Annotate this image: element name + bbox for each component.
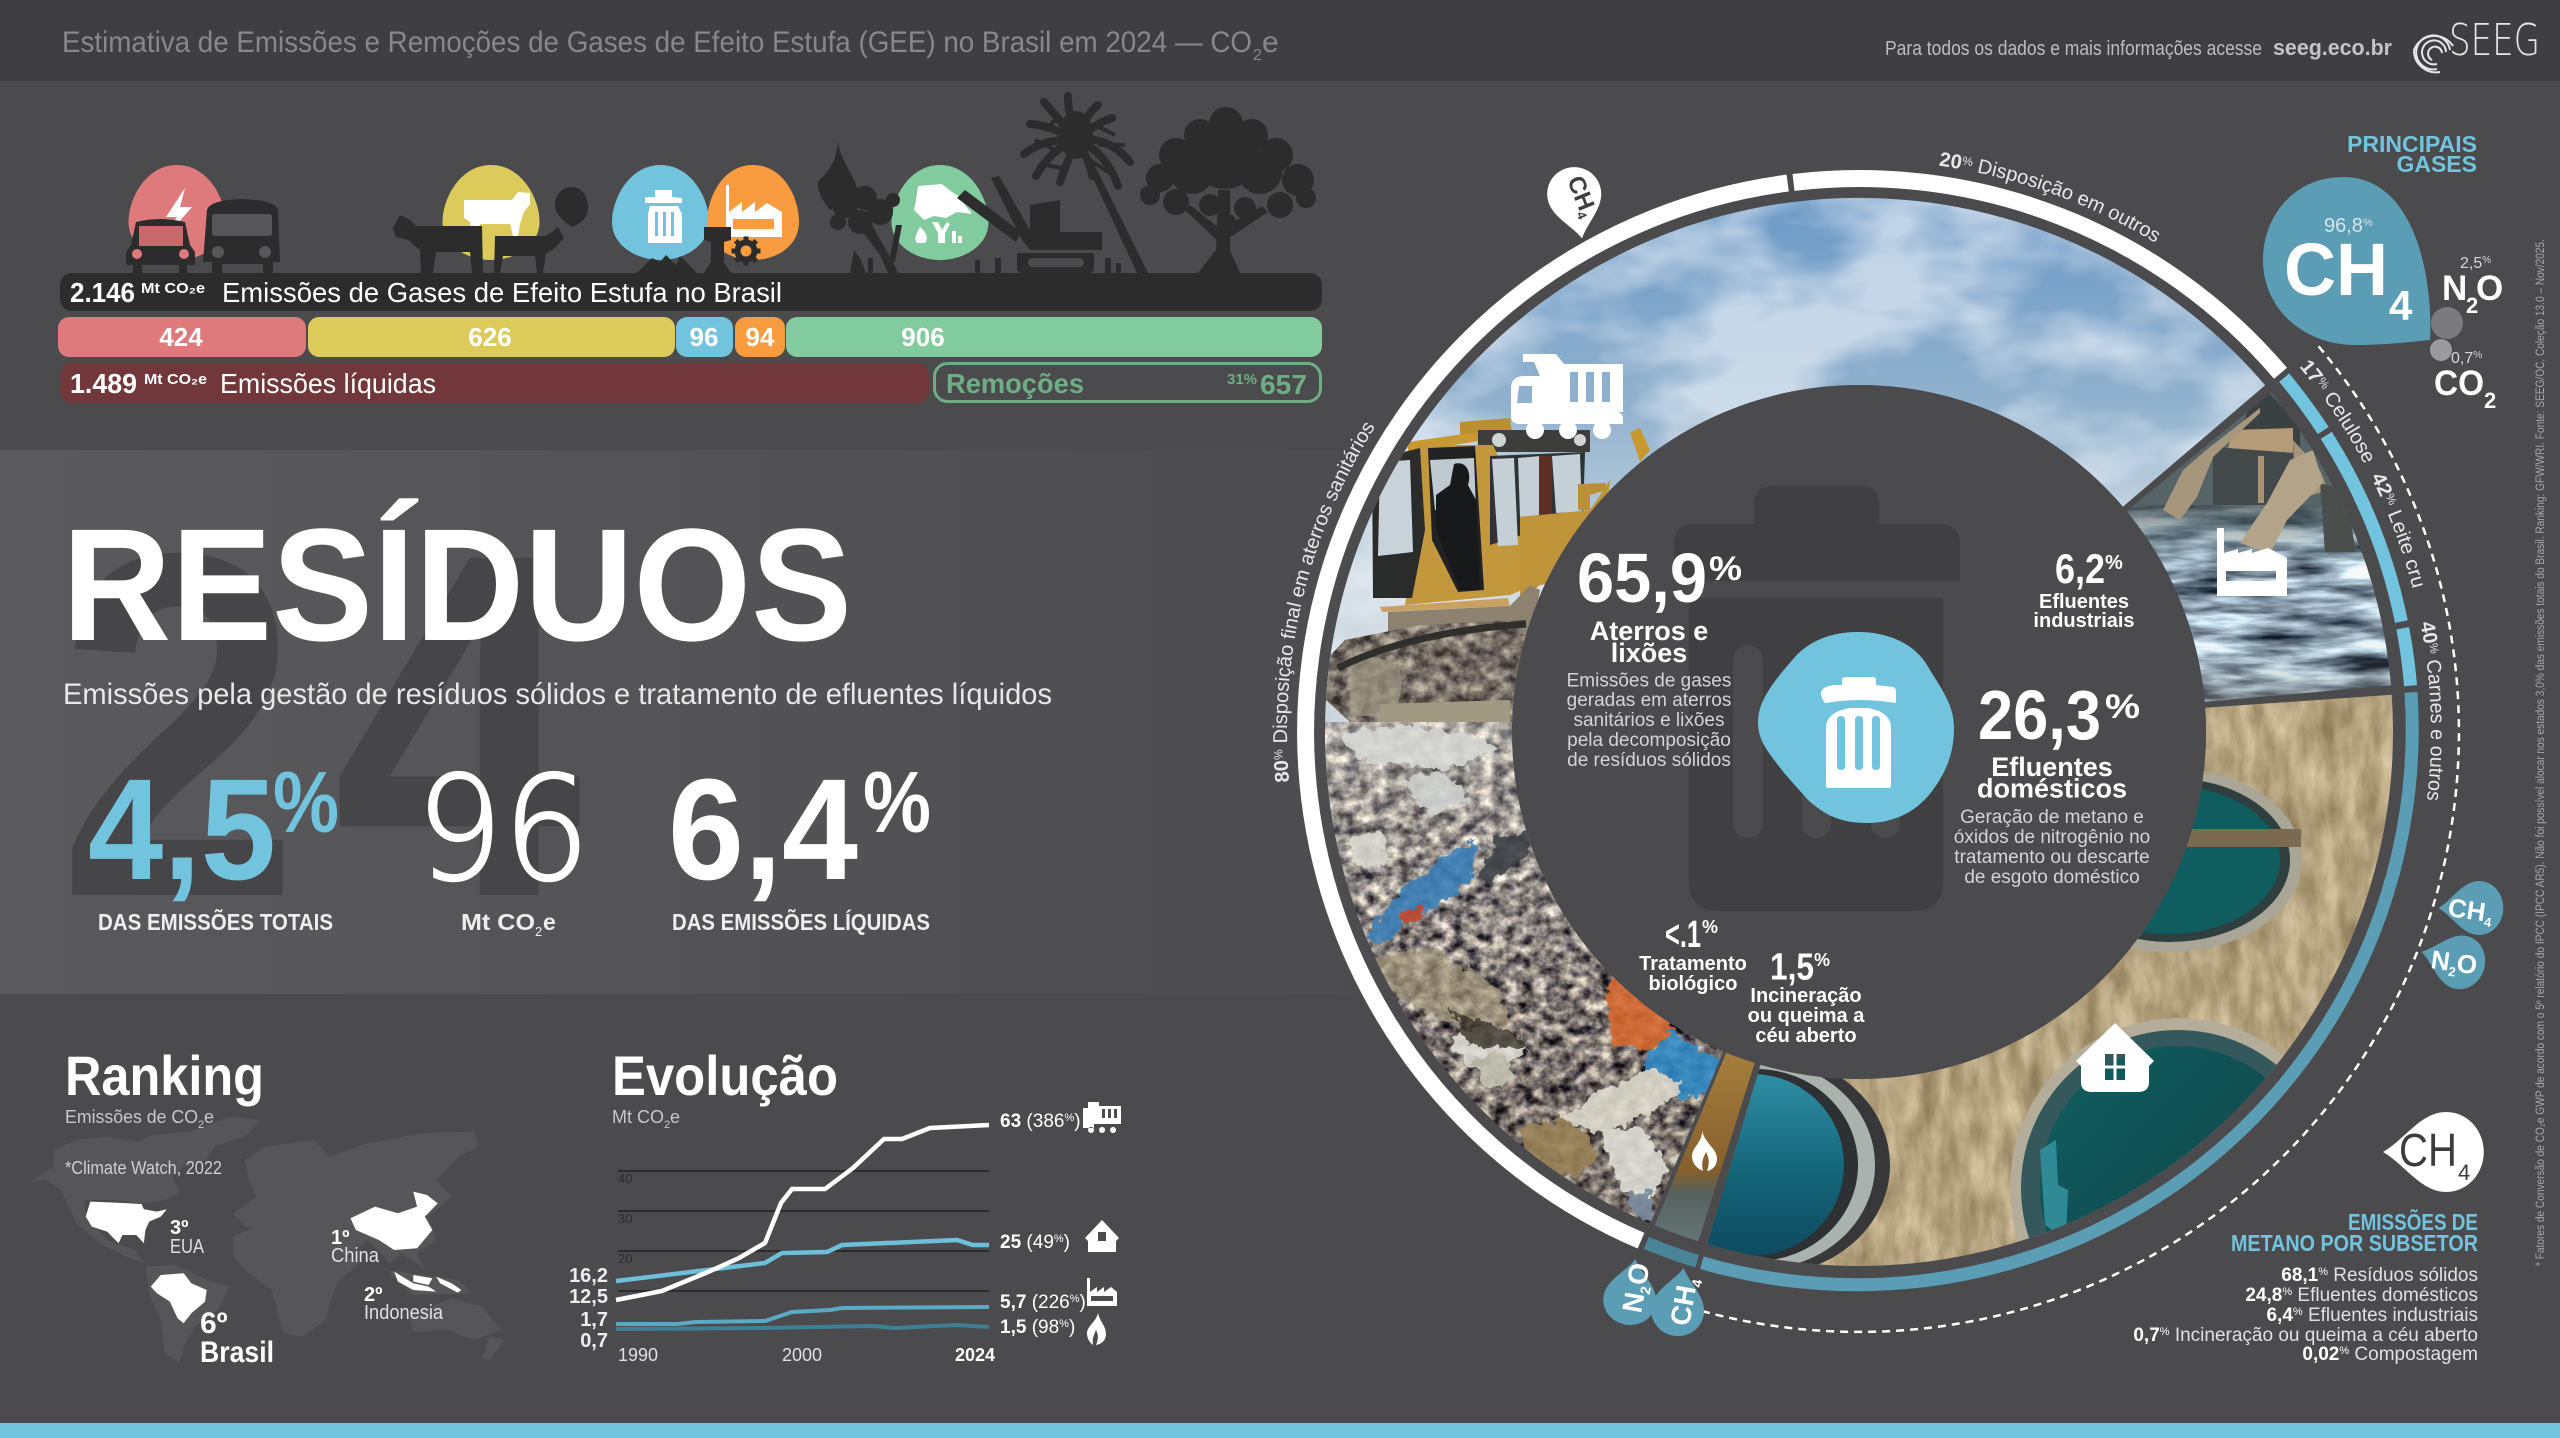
CH4 drop: 4 [2389, 282, 2413, 329]
stat: biological treatment: <.1 [1665, 914, 1701, 956]
bottom bar [0, 1423, 2560, 1438]
panel: main gases [2263, 131, 2503, 413]
end labels: % [1059, 1318, 1069, 1330]
photo: industrial effluent [2126, 392, 2391, 702]
drop CH4 bottom: CH [1664, 1283, 1702, 1328]
icon: flame [1692, 1130, 1717, 1171]
removals: 657 [1260, 369, 1307, 400]
land use blob [892, 165, 988, 260]
stat: incineration: ou queima a [1748, 1005, 1865, 1027]
icon: truck [1083, 1102, 1121, 1133]
site link: seeg.eco.br [2273, 35, 2392, 60]
stat: landfills: de resíduos sólidos [1567, 750, 1731, 771]
ghost trash can [1674, 486, 1960, 911]
stat: industrial effluents: Efluentes [2039, 591, 2129, 613]
list: Compostagem [2349, 1344, 2478, 1365]
photo: domestic effluent tanks [1707, 694, 2393, 1266]
drop N2O bottom: O [1621, 1261, 1656, 1287]
ring labels: Disposição final em aterros sanitários [1272, 400, 1420, 742]
stat: biological treatment: biológico [1649, 973, 1737, 995]
ranking panel [31, 1044, 505, 1369]
sector bar: 96 [690, 322, 718, 352]
N2O: N [2442, 269, 2467, 308]
heading [2231, 1208, 2478, 1256]
stat: incineration: 1,5 [1770, 946, 1814, 988]
white CH4 drop: CH [2399, 1124, 2457, 1176]
China [331, 1192, 438, 1267]
ghost year 2024 [0, 451, 585, 999]
list: 6,4 [2266, 1305, 2293, 1326]
tank upper right [2130, 771, 2302, 952]
white CH4 drop: 4 [2458, 1160, 2470, 1185]
drop N2O bottom: 2 [1637, 1285, 1654, 1295]
net emissions and removals bar: Emissões líquidas [220, 368, 436, 399]
list: 24,8 [2245, 1285, 2282, 1306]
drop: CH4 on solid disposal: 4 [1573, 209, 1590, 222]
list: % [2293, 1306, 2303, 1318]
line chart: 2000 [782, 1345, 822, 1365]
icon: house [1085, 1220, 1119, 1252]
drop: CH4 on solid disposal [1543, 163, 1609, 243]
page super-title: Estimativa de Emissões e Remoções de Gases de Efeito Estufa (GEE) no Brasil em 2024 — CO [62, 26, 1252, 59]
net emissions and removals bar: Mt CO₂e [144, 371, 207, 388]
unit [612, 1107, 680, 1131]
total emissions bar [60, 273, 1322, 311]
stat: biological treatment [1639, 914, 1747, 995]
stat: domestic effluents: tratamento ou descarte [1954, 847, 2150, 868]
list: % [2160, 1326, 2170, 1338]
stat: industrial effluents: % [2105, 552, 2123, 574]
CO2 [2430, 339, 2496, 413]
unit note: e [204, 1107, 214, 1127]
net emissions and removals bar: 1.489 [70, 368, 137, 399]
list: 68,1 [2281, 1265, 2319, 1286]
stat: domestic effluents: de esgoto doméstico [1964, 867, 2140, 888]
list: % [2282, 1286, 2292, 1298]
stat: incineration: céu aberto [1755, 1025, 1857, 1047]
drop CH4 bottom [1648, 1264, 1710, 1339]
ring labels: 80 [1274, 760, 1289, 782]
stat: landfills: geradas em aterros [1567, 690, 1731, 711]
ghost year 2024: 4 [333, 451, 585, 999]
drops: gases in incineration [1600, 1255, 1710, 1339]
stat: domestic effluents: Geração de metano e [1960, 807, 2144, 828]
ring labels: Celulose [2326, 392, 2372, 462]
net emissions and removals bar [60, 363, 1320, 403]
stat: incineration: Incineração [1750, 985, 1862, 1007]
list: % [2318, 1266, 2328, 1278]
stat: landfills [1567, 539, 1742, 771]
stat: landfills: Aterros e [1590, 616, 1708, 646]
central blob with trash icon [1758, 632, 1954, 823]
stat: incineration: % [1814, 950, 1830, 970]
line chart: 20 [618, 1251, 632, 1266]
drop N2O right: O [2455, 948, 2479, 980]
garbage field [1324, 722, 1724, 1224]
bus and car silhouettes [126, 199, 280, 273]
stat: incineration [1748, 946, 1865, 1047]
list: Resíduos sólidos [2328, 1265, 2478, 1286]
line chart: 1990 [618, 1345, 658, 1365]
CH4 drop: CH [2284, 228, 2388, 311]
Brasil: 6º [200, 1307, 228, 1340]
unit: 2 [664, 1119, 670, 1131]
total emissions bar: Emissões de Gases de Efeito Estufa no Brasil [222, 277, 782, 308]
panel: methane by subsector [2133, 1112, 2484, 1365]
drop N2O right: N [2429, 944, 2452, 977]
stat: landfills: Emissões de gases [1567, 670, 1731, 692]
stat: absolute emissions: 2 [535, 924, 542, 939]
stat: share of total emissions [88, 749, 339, 935]
CH4 drop [2263, 177, 2430, 345]
stat: share of net emissions: % [863, 755, 931, 851]
agriculture blob [442, 165, 540, 260]
waste blob [612, 165, 709, 260]
total emissions bar: 2.146 [70, 277, 135, 308]
end labels: 25 (49 [1000, 1232, 1054, 1253]
end labels: 5,7 (226 [1000, 1292, 1070, 1313]
CH4 drop: 96,8 [2324, 215, 2363, 237]
drop CH4 right [2438, 881, 2503, 935]
ring labels: % [2318, 377, 2329, 389]
N2O: O [2476, 269, 2503, 308]
ring labels [1272, 152, 2443, 800]
stat: share of total emissions: DAS EMISSÕES TOTAIS [98, 908, 333, 935]
stat: landfills: 65,9 [1577, 539, 1707, 617]
stat: landfills: % [1709, 550, 1742, 588]
icon: truck [1511, 354, 1623, 439]
unit note: 2 [198, 1119, 204, 1131]
end labels: 63 (386 [1000, 1111, 1064, 1132]
ring labels: Disposição em outros [1978, 159, 2160, 242]
tank lower right [2010, 1018, 2284, 1242]
China: 1º [331, 1227, 349, 1249]
stat: landfills: sanitários e lixões [1573, 710, 1725, 731]
N2O: 2,5 [2460, 255, 2482, 272]
stat: share of net emissions: 6,4 [668, 749, 858, 910]
dashed outer arc [1704, 346, 2459, 1332]
end labels: % [1054, 1233, 1064, 1245]
industry blob [707, 165, 799, 260]
USA: 3º [170, 1217, 188, 1239]
line chart: 12,5 [569, 1286, 608, 1308]
CH4 drop: % [2363, 217, 2373, 229]
sector silhouettes and icons skyline [126, 96, 1316, 273]
drop N2O right [2415, 926, 2491, 995]
USA: EUA [170, 1236, 205, 1258]
sector bar: 424 [159, 322, 203, 352]
world map [31, 1117, 505, 1363]
header bar [0, 0, 2560, 81]
ghost year 2024: 2 [57, 451, 300, 999]
list [2133, 1265, 2478, 1365]
stat: industrial effluents [2033, 545, 2135, 632]
site link: Para todos os dados e mais informações acesse [1885, 38, 2262, 60]
central band [0, 450, 1500, 994]
page super-title: 2 [1253, 47, 1262, 64]
CO2: % [2473, 350, 2482, 361]
stat: domestic effluents: 26,3 [1978, 676, 2101, 754]
end labels: ) [1080, 1292, 1086, 1313]
removals: Remoções [946, 368, 1084, 399]
stat: share of net emissions [668, 749, 931, 935]
end labels: % [1070, 1293, 1080, 1305]
evolution chart panel [569, 1044, 1121, 1365]
methane balloon [555, 187, 588, 227]
ring labels: 17 [2300, 360, 2324, 380]
N2O [2431, 255, 2503, 339]
sector bar: 906 [901, 322, 945, 352]
line chart [569, 1125, 995, 1365]
end labels: ) [1069, 1317, 1075, 1338]
icon: factory [1087, 1278, 1117, 1306]
Indonesia: 2º [364, 1284, 382, 1306]
subtitle: Emissões pela gestão de resíduos sólidos e tratamento de efluentes líquidos [63, 678, 1052, 711]
page super-title: e [1262, 26, 1279, 59]
list: Efluentes domésticos [2292, 1285, 2478, 1306]
footnote vertical: * Fatores de Conversão de CO₂e GWP de acordo com o 5º relatório do IPCC (IPCC AR5). Não foi possível alocar nos estados 3,0% das emissões totais do Brasil. Ranking: GFW/WRI. Fonte: SEEG/OC, Coleção 13.0 – Nov/2025. [2535, 239, 2547, 1266]
stat: domestic effluents [1954, 676, 2150, 888]
ring labels: % [2386, 494, 2396, 505]
stat: share of total emissions: % [273, 755, 339, 851]
unit: Mt CO [612, 1107, 664, 1127]
ring labels: % [1963, 156, 1972, 166]
ring labels: Leite cru [2388, 510, 2423, 588]
stat: absolute emissions: 96 [416, 745, 590, 913]
icon: house [2076, 1023, 2154, 1092]
list: 0,7 [2133, 1325, 2160, 1346]
sector bar: 626 [468, 322, 512, 352]
heading [2347, 131, 2477, 177]
bulldozer [1320, 418, 1650, 724]
stat: landfills: lixões [1611, 638, 1687, 668]
unit: e [670, 1107, 680, 1127]
drop: CH4 on solid disposal: CH [1561, 172, 1599, 214]
sector bar [58, 317, 1322, 357]
ring labels: 20 [1939, 152, 1962, 168]
stat: biological treatment: Tratamento [1639, 953, 1747, 975]
removals: 31% [1227, 371, 1257, 388]
heading: EMISSÕES DE [2348, 1208, 2478, 1235]
China: China [331, 1245, 380, 1267]
heading: METANO POR SUBSETOR [2231, 1230, 2478, 1256]
N2O: % [2482, 255, 2491, 266]
Indonesia: Indonesia [364, 1302, 444, 1324]
ring labels: 42 [2374, 474, 2392, 497]
stat: domestic effluents: domésticos [1977, 774, 2127, 804]
list: Incineração ou queima a céu aberto [2170, 1325, 2478, 1346]
USA [86, 1202, 205, 1258]
CO2: CO [2434, 364, 2484, 403]
drops: gases in domestic effluents [2415, 881, 2503, 995]
photo: incineration [1654, 1052, 1755, 1242]
heading: GASES [2396, 151, 2477, 177]
unit note: Emissões de CO [65, 1107, 198, 1127]
line chart: 30 [618, 1211, 632, 1226]
total emissions bar: Mt CO₂e [141, 280, 205, 297]
ring labels: 40 [2422, 622, 2438, 643]
line chart: 16,2 [569, 1265, 608, 1287]
cattle silhouettes [393, 187, 588, 273]
palm tree [1024, 96, 1148, 273]
circular subsector chart [1272, 152, 2494, 1336]
line chart: 1,7 [580, 1309, 608, 1331]
large tree [1140, 107, 1316, 273]
ring labels: % [1274, 750, 1282, 760]
removals [934, 364, 1320, 402]
stat: absolute emissions: Mt CO [461, 909, 535, 935]
white CH4 drop [2383, 1112, 2484, 1192]
drop CH4 bottom: 4 [1688, 1278, 1705, 1289]
end labels: ) [1074, 1111, 1081, 1132]
Indonesia [364, 1272, 461, 1324]
ring labels: Carnes e outros [2427, 660, 2443, 800]
CO2: 0,7 [2451, 350, 2473, 367]
end labels [1000, 1111, 1086, 1338]
stat: biological treatment: % [1702, 917, 1718, 937]
tank lower left [1757, 1065, 1890, 1264]
Brasil: Brasil [200, 1336, 274, 1369]
stat: absolute emissions: e [543, 909, 556, 935]
stat: industrial effluents: industriais [2033, 610, 2135, 632]
stat: domestic effluents: % [2105, 688, 2140, 726]
stat: domestic effluents: óxidos de nitrogênio no [1954, 827, 2150, 848]
SEEG logo [2414, 15, 2540, 72]
drop N2O right: 2 [2447, 964, 2457, 980]
line chart: 0,7 [580, 1330, 608, 1352]
stat: share of net emissions: DAS EMISSÕES LÍQUIDAS [672, 908, 930, 935]
drop N2O bottom [1600, 1255, 1662, 1328]
stat: domestic effluents: Efluentes [1991, 752, 2113, 782]
stat: share of total emissions: 4,5 [88, 749, 276, 910]
drop CH4 right: 4 [2483, 914, 2493, 930]
list: Efluentes industriais [2303, 1305, 2478, 1326]
icon: flame [1087, 1313, 1106, 1345]
flame and small tree silhouettes [818, 135, 902, 273]
Brasil [151, 1273, 274, 1369]
photo: landfill with bulldozer and sky [1300, 190, 2300, 1262]
energy blob [128, 165, 226, 260]
source note: *Climate Watch, 2022 [65, 1158, 222, 1178]
main title: RESÍDUOS [62, 495, 852, 674]
inner dark disc [1512, 385, 2206, 1079]
line chart: 2024 [955, 1345, 995, 1365]
line chart: 40 [618, 1171, 632, 1186]
list: % [2339, 1345, 2349, 1357]
N2O: 2 [2466, 293, 2478, 318]
heading: Evolução [612, 1044, 838, 1107]
drop N2O bottom: N [1616, 1290, 1650, 1315]
icon: factory [2217, 528, 2287, 596]
drop CH4 right: CH [2446, 892, 2488, 927]
list: 0,02 [2302, 1344, 2339, 1365]
heading: PRINCIPAIS [2347, 131, 2477, 157]
stat: landfills: pela decomposição [1567, 730, 1731, 751]
heading: Ranking [65, 1044, 264, 1107]
sector bar: 94 [746, 322, 775, 352]
end labels: 1,5 (98 [1000, 1317, 1059, 1338]
outer segmented ring [1306, 179, 2412, 1285]
pump, peaks and gear [637, 227, 760, 273]
CO2: 2 [2484, 388, 2496, 413]
end labels: ) [1064, 1232, 1070, 1253]
ring labels: % [2430, 643, 2439, 654]
stat: industrial effluents: 6,2 [2055, 545, 2105, 592]
excavator silhouette [957, 176, 1121, 273]
end labels: % [1064, 1112, 1074, 1124]
